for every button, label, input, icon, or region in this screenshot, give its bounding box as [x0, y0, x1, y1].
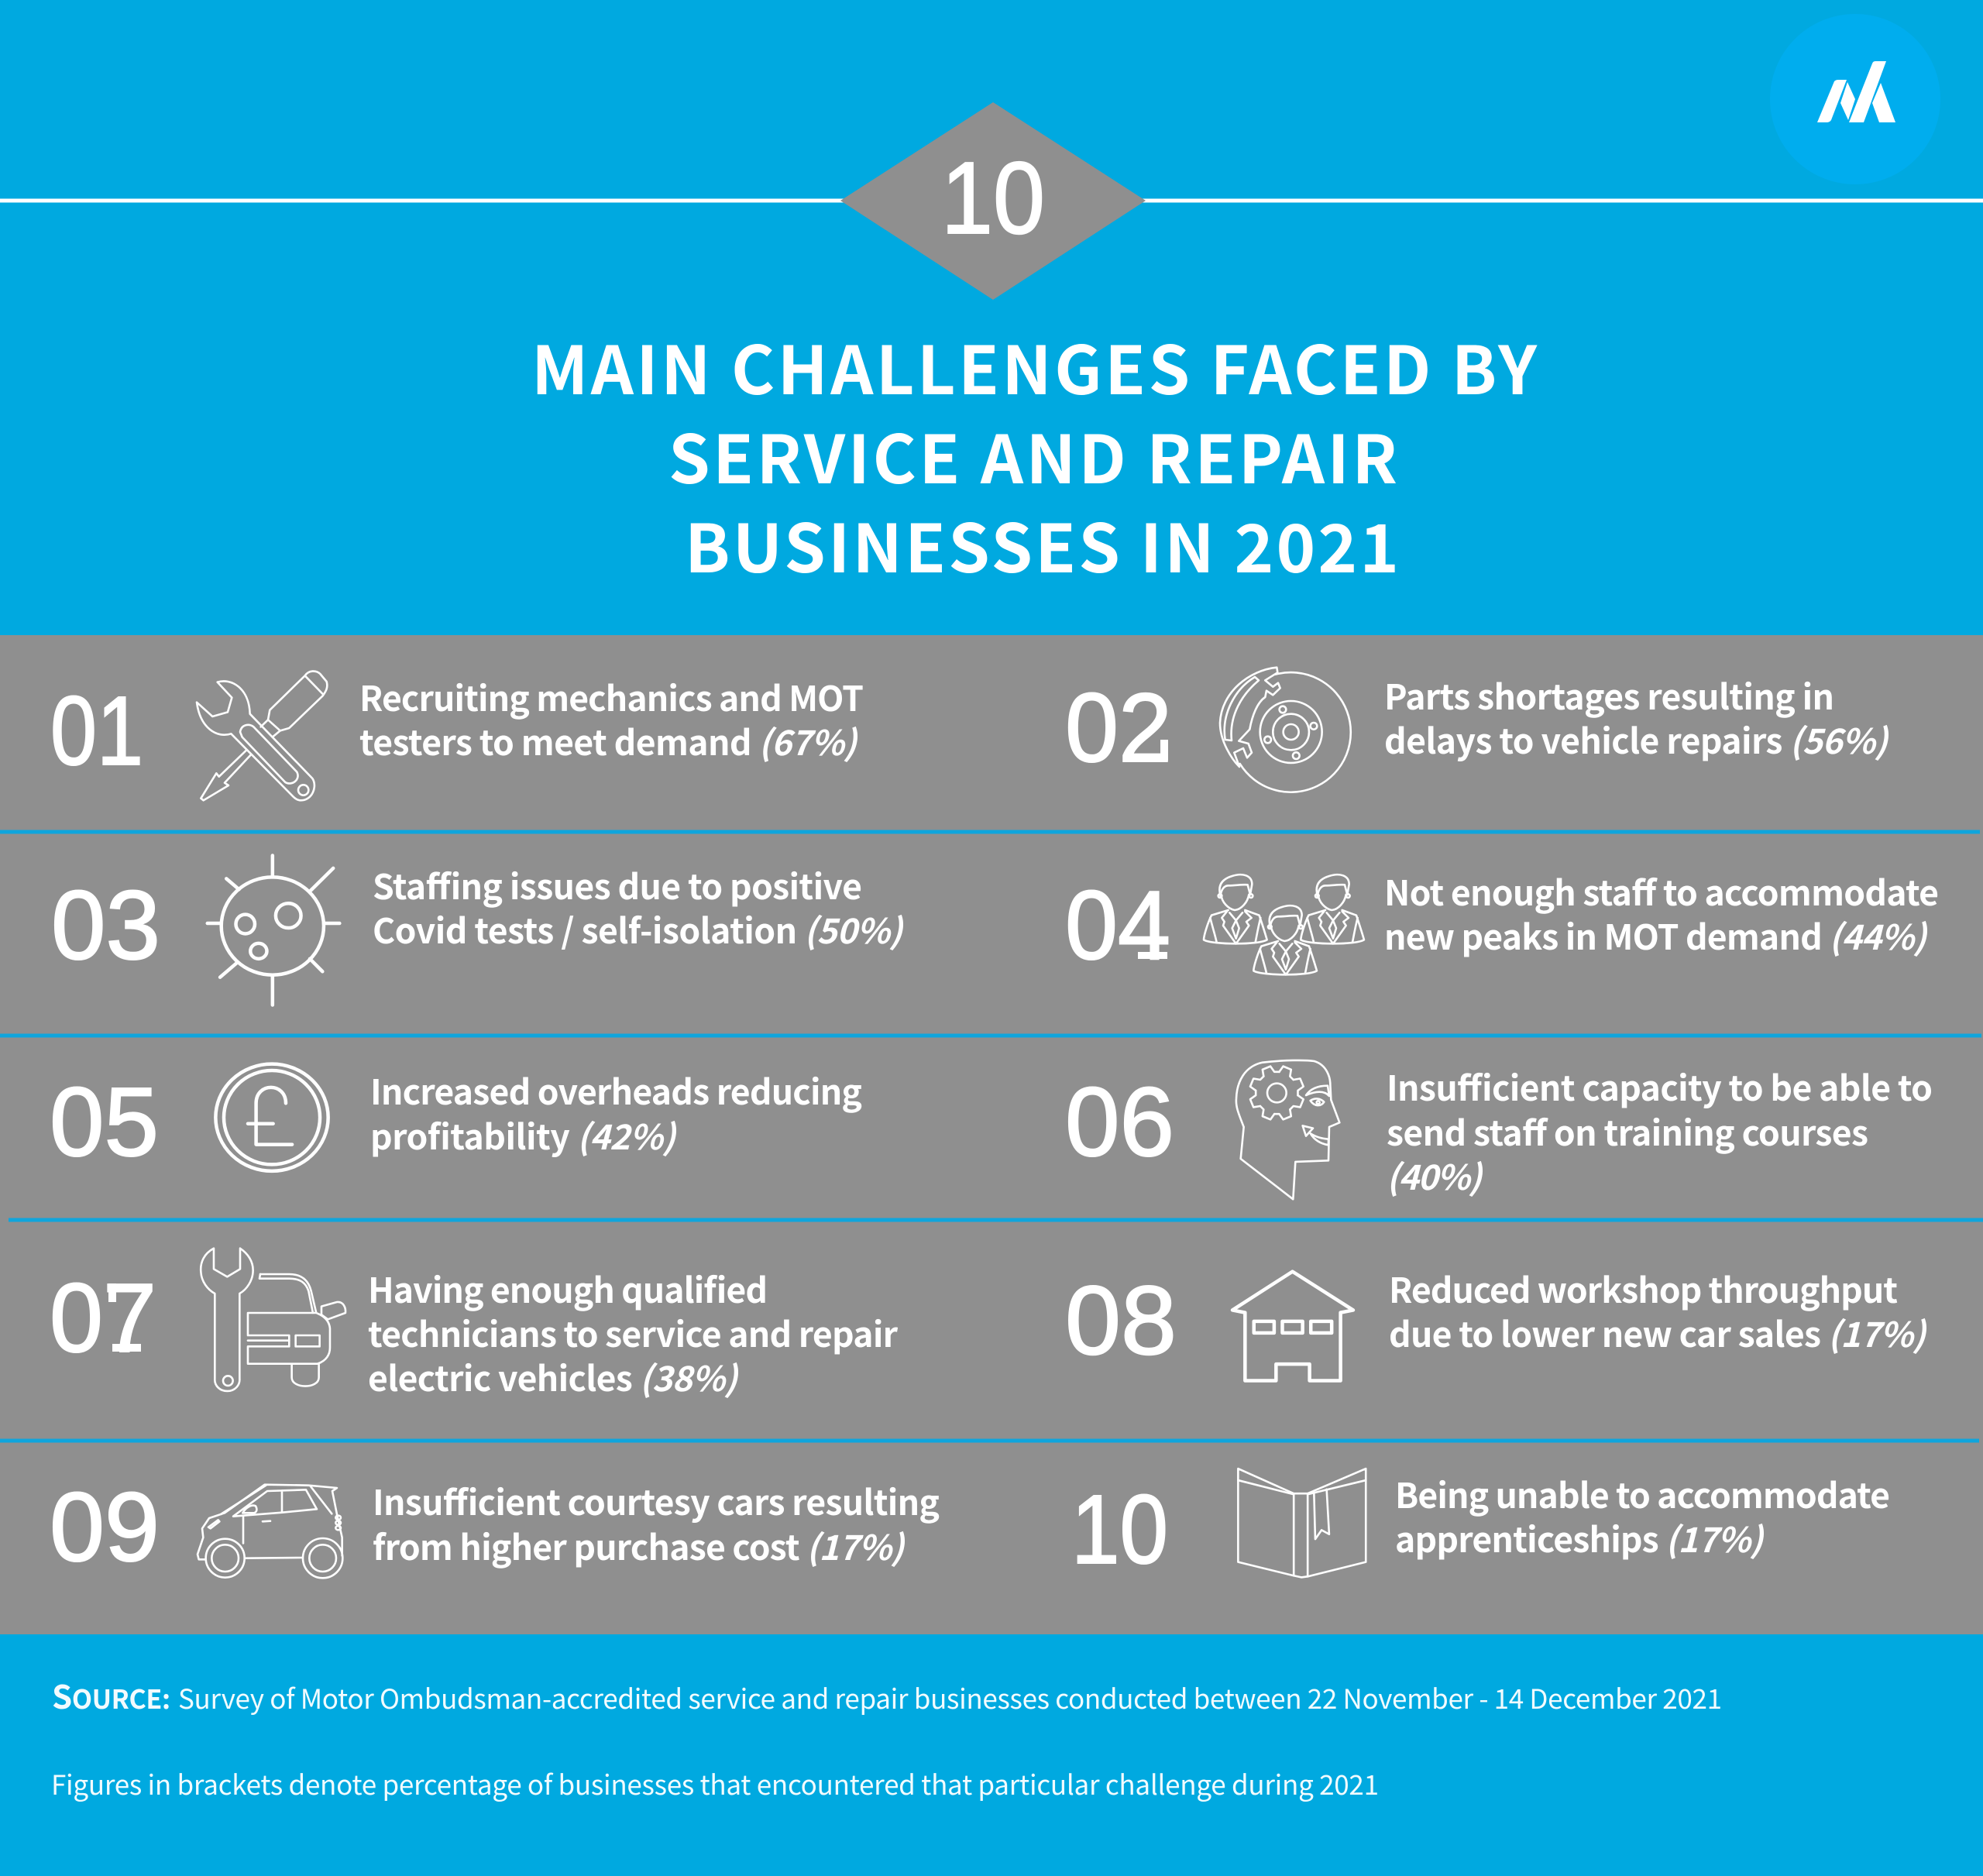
source note: SOURCE: [52, 1672, 170, 1719]
challenge 07: technicians to service and repair [368, 1307, 899, 1357]
challenge 03: 03 [51, 871, 160, 980]
icon: three staff members [1204, 874, 1364, 974]
header rule [0, 198, 1983, 203]
title: MAIN CHALLENGES FACED BY [531, 317, 1538, 414]
challenge 06 [1065, 1060, 1933, 1200]
challenge 04: new peaks in MOT demand (44%) [1384, 909, 1928, 960]
footnote: Figures in brackets denote percentage of businesses that encountered that particular challenge during 2021 [51, 1764, 1379, 1803]
text: Increased overheads reducing [370, 1064, 862, 1115]
challenge 08 [1065, 1263, 1927, 1380]
text: Insufficient capacity to be able to [1387, 1060, 1933, 1111]
challenge 07: electric vehicles (38%) [368, 1351, 739, 1401]
source text: Survey of Motor Ombudsman-accredited service and repair businesses conducted between 22 November - 14 December 2021 [178, 1678, 1722, 1717]
challenge 08: due to lower new car sales (17%) [1389, 1307, 1927, 1357]
icon: wrench and car [201, 1249, 345, 1391]
challenge 01: testers to meet demand (67%) [359, 715, 858, 765]
challenge 05: 05 [50, 1067, 159, 1177]
challenge 09 [50, 1472, 940, 1582]
icon: workshop building [1232, 1272, 1353, 1380]
challenge 04 [1065, 865, 1939, 980]
challenge 06: send staff on training courses [1387, 1105, 1868, 1156]
text: Insufficient courtesy cars resulting [373, 1475, 940, 1525]
challenge 09: 09 [50, 1472, 160, 1582]
icon: pound coin [215, 1064, 328, 1171]
text: Recruiting mechanics and MOT [359, 671, 864, 721]
icon: virus [208, 856, 339, 1005]
challenge 03 [51, 856, 904, 1005]
text: Being unable to accommodate [1395, 1468, 1890, 1518]
text: Having enough qualified [368, 1263, 768, 1313]
badge: 10 diamond: 10 [941, 141, 1045, 255]
title: BUSINESSES IN 2021 [685, 495, 1399, 592]
challenge 10: 10 [1071, 1475, 1168, 1584]
badge: 10 diamond [840, 102, 1146, 300]
challenge 10: apprenticeships (17%) [1395, 1512, 1765, 1562]
text: Parts shortages resulting in [1384, 669, 1834, 720]
icon: brake disc [1220, 668, 1351, 792]
challenge 09: from higher purchase cost (17%) [373, 1520, 906, 1570]
challenge 05: profitability (42%) [370, 1109, 677, 1160]
text: Not enough staff to accommodate [1384, 865, 1939, 916]
icon: wrench and screwdriver [197, 672, 327, 800]
challenge 07 [50, 1249, 899, 1401]
title: SERVICE AND REPAIR [668, 406, 1397, 503]
panel: challenges list [0, 635, 1983, 1634]
challenge 02: delays to vehicle repairs (56%) [1384, 713, 1889, 764]
challenge 06: (40%) [1387, 1149, 1483, 1200]
logo [1770, 14, 1940, 184]
icon: head with gear [1236, 1060, 1339, 1199]
icon: courtesy car [198, 1485, 342, 1578]
icon: open book [1238, 1469, 1366, 1577]
challenge 10 [1071, 1468, 1890, 1584]
challenge 06: 06 [1065, 1067, 1174, 1177]
challenge 02 [1065, 668, 1889, 792]
text: Staffing issues due to positive [373, 859, 862, 909]
challenge 01: 01 [50, 676, 143, 785]
challenge 01 [50, 671, 864, 800]
challenge 04: 04 [1065, 871, 1170, 980]
challenge 08: 08 [1065, 1266, 1177, 1375]
title [531, 317, 1538, 592]
challenge 05 [50, 1064, 862, 1177]
challenge 07: 07 [50, 1263, 156, 1373]
challenge 02: 02 [1065, 673, 1172, 782]
challenge 03: Covid tests / self-isolation (50%) [373, 903, 904, 953]
text: Reduced workshop throughput [1389, 1263, 1898, 1313]
